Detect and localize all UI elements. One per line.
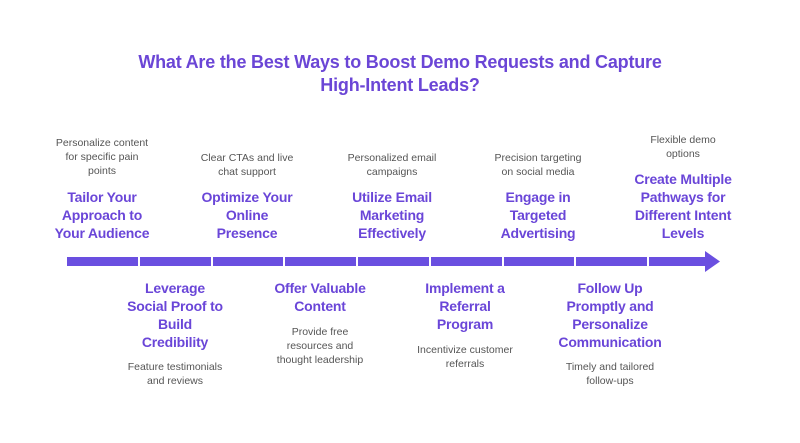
desc: optimize: Clear CTAs and live (201, 152, 293, 164)
heading: advertising: Engage in (505, 189, 571, 205)
desc: social proof: Feature testimonials (128, 361, 222, 373)
heading: optimize: Online (226, 207, 268, 223)
title: What Are the Best Ways to Boost Demo Requests and Capture (138, 52, 662, 72)
heading: tailor: Approach to (62, 207, 142, 223)
desc: advertising (495, 152, 581, 178)
heading: social proof (127, 280, 223, 350)
desc: social proof: and reviews (147, 375, 203, 387)
heading: follow up: Communication (558, 334, 662, 350)
desc: tailor: points (88, 165, 116, 177)
heading: advertising: Advertising (501, 225, 575, 241)
desc: tailor (56, 137, 148, 177)
desc: pathways: options (666, 148, 700, 160)
title: High-Intent Leads? (320, 75, 480, 95)
title (138, 52, 662, 95)
heading: email: Marketing (360, 207, 424, 223)
desc: optimize: chat support (218, 166, 276, 178)
heading: social proof: Build (158, 316, 192, 332)
desc: follow up (566, 361, 654, 387)
desc: referral (417, 344, 513, 370)
heading: follow up: Follow Up (577, 280, 643, 296)
desc: optimize (201, 152, 293, 178)
heading: email: Effectively (358, 225, 426, 241)
desc: social proof (128, 361, 222, 387)
desc: content: resources and (287, 340, 353, 352)
heading: follow up: Personalize (572, 316, 648, 332)
heading: email (352, 189, 432, 241)
heading: referral: Program (437, 316, 493, 332)
heading: follow up (558, 280, 662, 350)
desc: content: Provide free (292, 326, 348, 338)
heading: referral (425, 280, 505, 332)
desc: email: campaigns (367, 166, 417, 178)
heading: advertising: Targeted (510, 207, 566, 223)
heading: pathways: Different Intent (635, 207, 731, 223)
desc: content (276, 326, 363, 366)
heading: email: Utilize Email (352, 189, 432, 205)
desc: content: thought leadership (277, 354, 363, 366)
heading: pathways: Create Multiple (634, 171, 732, 187)
desc: pathways: Flexible demo (650, 134, 716, 146)
heading: optimize: Optimize Your (201, 189, 292, 205)
heading: social proof: Leverage (145, 280, 205, 296)
desc: follow up: follow-ups (586, 375, 634, 387)
heading: tailor: Your Audience (55, 225, 149, 241)
desc: tailor: for specific pain (66, 151, 138, 163)
desc: follow up: Timely and tailored (566, 361, 654, 373)
heading: pathways: Pathways for (641, 189, 725, 205)
desc: referral: referrals (446, 358, 484, 370)
heading: content: Content (294, 298, 346, 314)
heading: content (274, 280, 366, 314)
heading: optimize: Presence (217, 225, 277, 241)
heading: referral: Referral (439, 298, 491, 314)
heading: tailor: Tailor Your (67, 189, 137, 205)
desc: referral: Incentivize customer (417, 344, 513, 356)
heading: referral: Implement a (425, 280, 505, 296)
heading: content: Offer Valuable (274, 280, 366, 296)
desc: pathways (650, 134, 716, 160)
heading: optimize (201, 189, 292, 241)
desc: email: Personalized email (348, 152, 436, 164)
desc: advertising: on social media (502, 166, 574, 178)
heading: pathways (634, 171, 732, 241)
heading: social proof: Credibility (142, 334, 208, 350)
heading: advertising (501, 189, 575, 241)
desc: email (348, 152, 436, 178)
desc: tailor: Personalize content (56, 137, 148, 149)
desc: advertising: Precision targeting (495, 152, 581, 164)
heading: pathways: Levels (662, 225, 704, 241)
heading: social proof: Social Proof to (127, 298, 223, 314)
heading: follow up: Promptly and (566, 298, 654, 314)
heading: tailor (54, 189, 150, 241)
